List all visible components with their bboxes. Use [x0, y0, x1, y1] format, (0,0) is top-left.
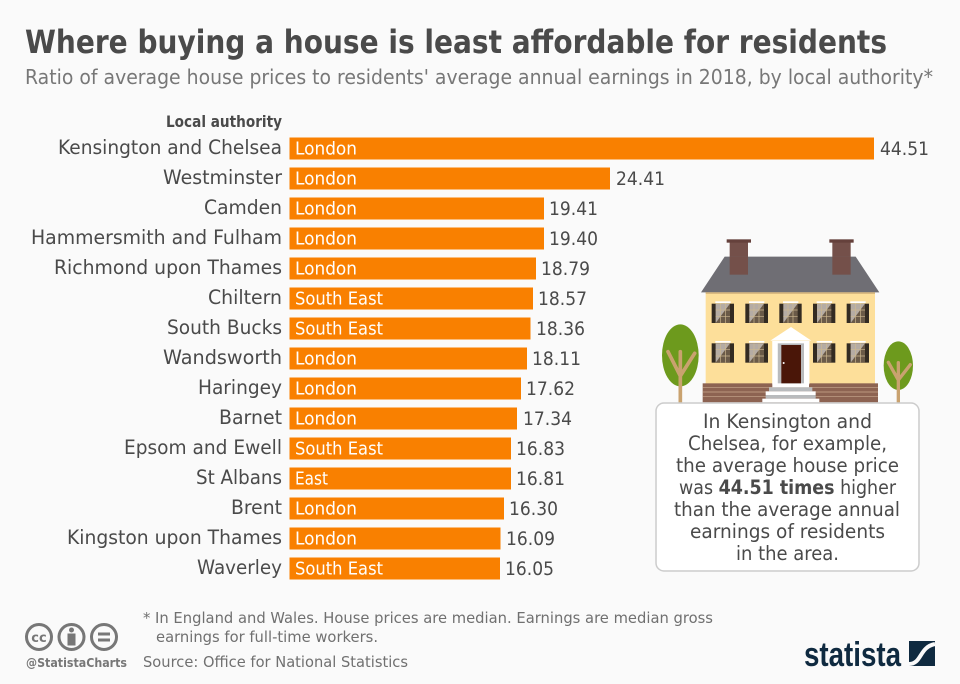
row: Westminster [163, 166, 665, 190]
callout: the average house price [676, 454, 899, 477]
row: St Albans: St Albans [196, 466, 282, 489]
row: Wandsworth: Wandsworth [163, 346, 282, 369]
row: Waverley: Waverley [197, 556, 282, 579]
row: South Bucks [167, 316, 585, 340]
row: Westminster: 24.41 [616, 168, 665, 190]
row: Wandsworth [163, 346, 581, 370]
row: Waverley [197, 556, 554, 580]
callout: was 44.51 times higher [679, 476, 896, 499]
row: South Bucks: 18.36 [536, 318, 585, 340]
row: Westminster: London [295, 170, 357, 190]
row: Kensington and Chelsea: London [295, 140, 357, 160]
row: St Albans [196, 466, 565, 490]
row: Epsom and Ewell [124, 436, 565, 460]
row: Barnet [219, 406, 572, 430]
row: Barnet: 17.34 [523, 408, 572, 430]
row: Kingston upon Thames [67, 526, 555, 550]
row: Hammersmith and Fulham [31, 226, 598, 250]
row: Brent: Brent [231, 496, 282, 519]
row: Haringey: Haringey [198, 376, 282, 399]
icon: roof [701, 257, 879, 292]
row: Brent: 16.30 [509, 498, 558, 520]
icon: house wall [706, 292, 875, 384]
row: Hammersmith and Fulham: London [295, 230, 357, 250]
icon: attribution [59, 624, 84, 650]
row: Brent: London [295, 500, 357, 520]
callout: earnings of residents [690, 520, 885, 543]
row: Camden [204, 196, 598, 220]
row: Barnet: Barnet [219, 406, 282, 429]
row: Haringey [198, 376, 575, 400]
row: Chiltern: Chiltern [208, 286, 282, 309]
callout: than the average annual [674, 498, 900, 521]
icon: door and porch [770, 327, 811, 384]
icon: house with trees [662, 239, 913, 402]
row: Westminster: Westminster [163, 166, 282, 189]
row: Waverley: 16.05 [505, 558, 554, 580]
row: Kensington and Chelsea: 44.51 [880, 138, 929, 160]
callout: in the area. [736, 542, 839, 565]
row: Chiltern [208, 286, 587, 310]
row: Haringey: 17.62 [526, 378, 575, 400]
footnote [143, 609, 713, 646]
row: South Bucks: South East [295, 320, 383, 340]
row: South Bucks: South Bucks [167, 316, 282, 339]
row: Wandsworth: London [295, 350, 357, 370]
icon: creative commons licence [26, 624, 116, 650]
row: Hammersmith and Fulham: Hammersmith and Fulham [31, 226, 282, 249]
row: Chiltern: 18.57 [538, 288, 587, 310]
icon: cc: cc [31, 631, 47, 646]
row: Kensington and Chelsea: Kensington and Chelsea [58, 136, 282, 159]
row: Camden: London [295, 200, 357, 220]
icon: statista mark [909, 641, 935, 666]
icon: left tree [662, 324, 699, 402]
callout: Chelsea, for example, [688, 432, 887, 455]
row: Richmond upon Thames [54, 256, 590, 280]
row: Waverley: South East [295, 560, 383, 580]
icon: front steps [762, 384, 819, 402]
icon: brick base [703, 383, 878, 402]
row: Richmond upon Thames: 18.79 [541, 258, 590, 280]
row: Kingston upon Thames: London [295, 530, 357, 550]
callout [656, 403, 919, 571]
row: Richmond upon Thames: London [295, 260, 357, 280]
row: Epsom and Ewell: 16.83 [516, 438, 565, 460]
row: Chiltern: South East [295, 290, 383, 310]
row: Brent [231, 496, 558, 520]
row: Epsom and Ewell: South East [295, 440, 383, 460]
callout: In Kensington and [703, 410, 872, 433]
source: Source: Office for National Statistics [143, 653, 408, 671]
icon: chimneys [727, 239, 854, 275]
footnote: earnings for full-time workers. [156, 628, 378, 646]
row: St Albans: East [295, 470, 328, 490]
row: St Albans: 16.81 [516, 468, 565, 490]
logo: statista: statista [804, 636, 902, 674]
row: Camden: 19.41 [549, 198, 598, 220]
row: Wandsworth: 18.11 [532, 348, 581, 370]
icon: right tree [884, 341, 913, 402]
row: Kingston upon Thames: Kingston upon Thames [67, 526, 282, 549]
credit handle: @StatistaCharts [26, 656, 127, 670]
row: Hammersmith and Fulham: 19.40 [549, 228, 598, 250]
bar chart [31, 136, 929, 580]
row: Haringey: London [295, 380, 357, 400]
row: Epsom and Ewell: Epsom and Ewell [124, 436, 282, 459]
row: Camden: Camden [204, 196, 282, 219]
row: Kingston upon Thames: 16.09 [506, 528, 555, 550]
icon: windows [712, 301, 869, 363]
row: Richmond upon Thames: Richmond upon Thames [54, 256, 282, 279]
row: Kensington and Chelsea [58, 136, 929, 160]
column heading: local authority: Local authority [166, 112, 282, 131]
footnote: * In England and Wales. House prices are median. Earnings are median gross [143, 609, 713, 627]
icon: no derivatives [92, 624, 116, 650]
row: Barnet: London [295, 410, 357, 430]
